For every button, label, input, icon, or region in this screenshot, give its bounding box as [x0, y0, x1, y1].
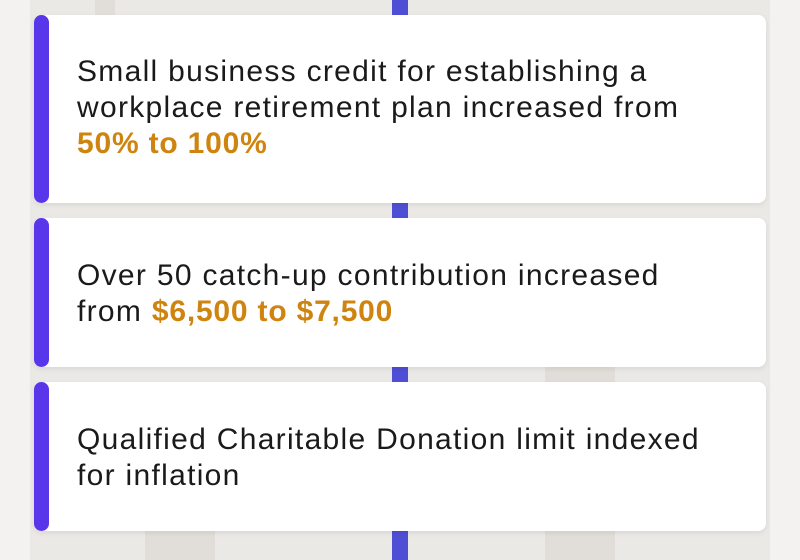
text: small business credit [77, 55, 679, 160]
text: catch-up contribution: Over 50 catch-up contribution increased [77, 259, 660, 292]
card 3: charitable donation [34, 382, 766, 531]
text: small business credit: 50% to 100% [77, 127, 268, 160]
text: small business credit: Small business credit for establishing a [77, 55, 648, 88]
text: charitable donation [77, 423, 700, 492]
text: charitable donation: Qualified Charitable Donation limit indexed [77, 423, 700, 456]
text: charitable donation: for inflation [77, 459, 241, 492]
text: catch-up contribution: from $6,500 to $7,500 [77, 295, 393, 328]
connector line [392, 0, 408, 560]
text: small business credit: workplace retirement plan increased from [77, 91, 679, 124]
card 1: small business credit [34, 15, 766, 203]
card 2: catch-up contribution [34, 218, 766, 367]
text: catch-up contribution [77, 259, 660, 328]
